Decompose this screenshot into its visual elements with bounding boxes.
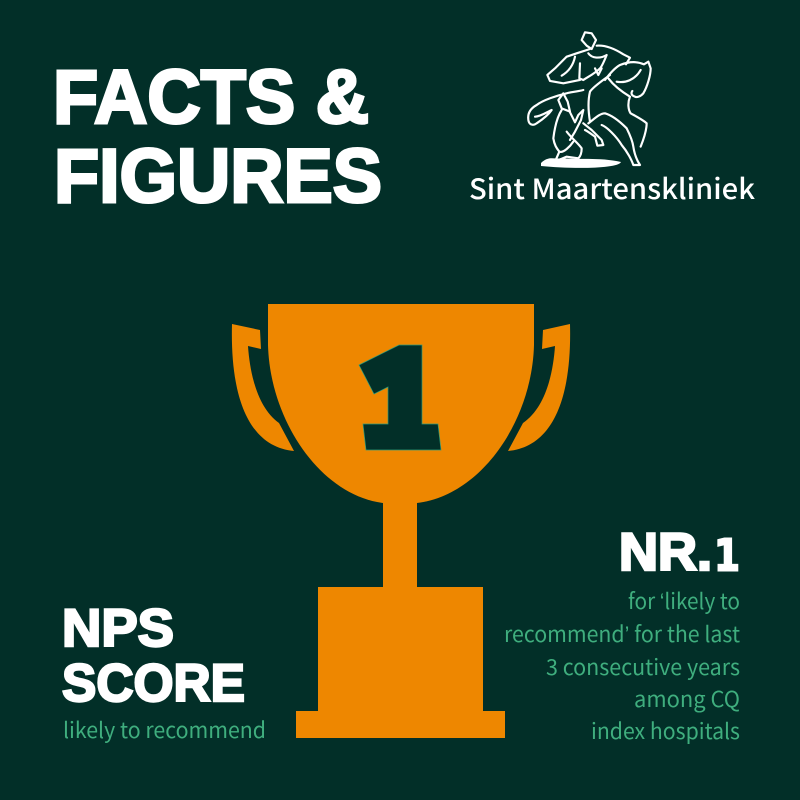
text: ranking description: 3 consecutive years [546,650,740,682]
heading: NPS score: SCORE [62,654,245,713]
text: ranking description: index hospitals [591,714,740,746]
logo wordmark: Sint Maartenskliniek [469,168,755,208]
icon: ground shadow [541,158,621,168]
trophy left handle [232,324,294,451]
title [53,55,382,219]
text: ranking description: among CQ [634,682,740,714]
heading: NPS score [62,599,245,713]
heading: NR.1: NR. [619,523,712,582]
text: ranking description: recommend’ for the last [504,617,740,649]
trophy bowl [268,304,534,503]
text: ranking description: for ‘likely to [628,584,740,616]
title: FIGURES [54,134,382,219]
trophy plinth [296,711,505,738]
icon: trophy [232,304,570,738]
heading: NR.1: 1 [714,530,740,582]
trophy base [318,587,483,712]
trophy right handle [508,324,570,451]
logo: Sint Maartenskliniek [469,32,755,208]
title: FACTS & [53,55,369,140]
number 1 on trophy [359,345,441,450]
heading: NPS score: NPS [62,599,174,658]
text: ranking description [504,584,740,746]
text: likely to recommend: likely to recommend [63,713,266,745]
trophy stem [383,500,417,590]
icon: horseman and beggar [528,32,651,165]
